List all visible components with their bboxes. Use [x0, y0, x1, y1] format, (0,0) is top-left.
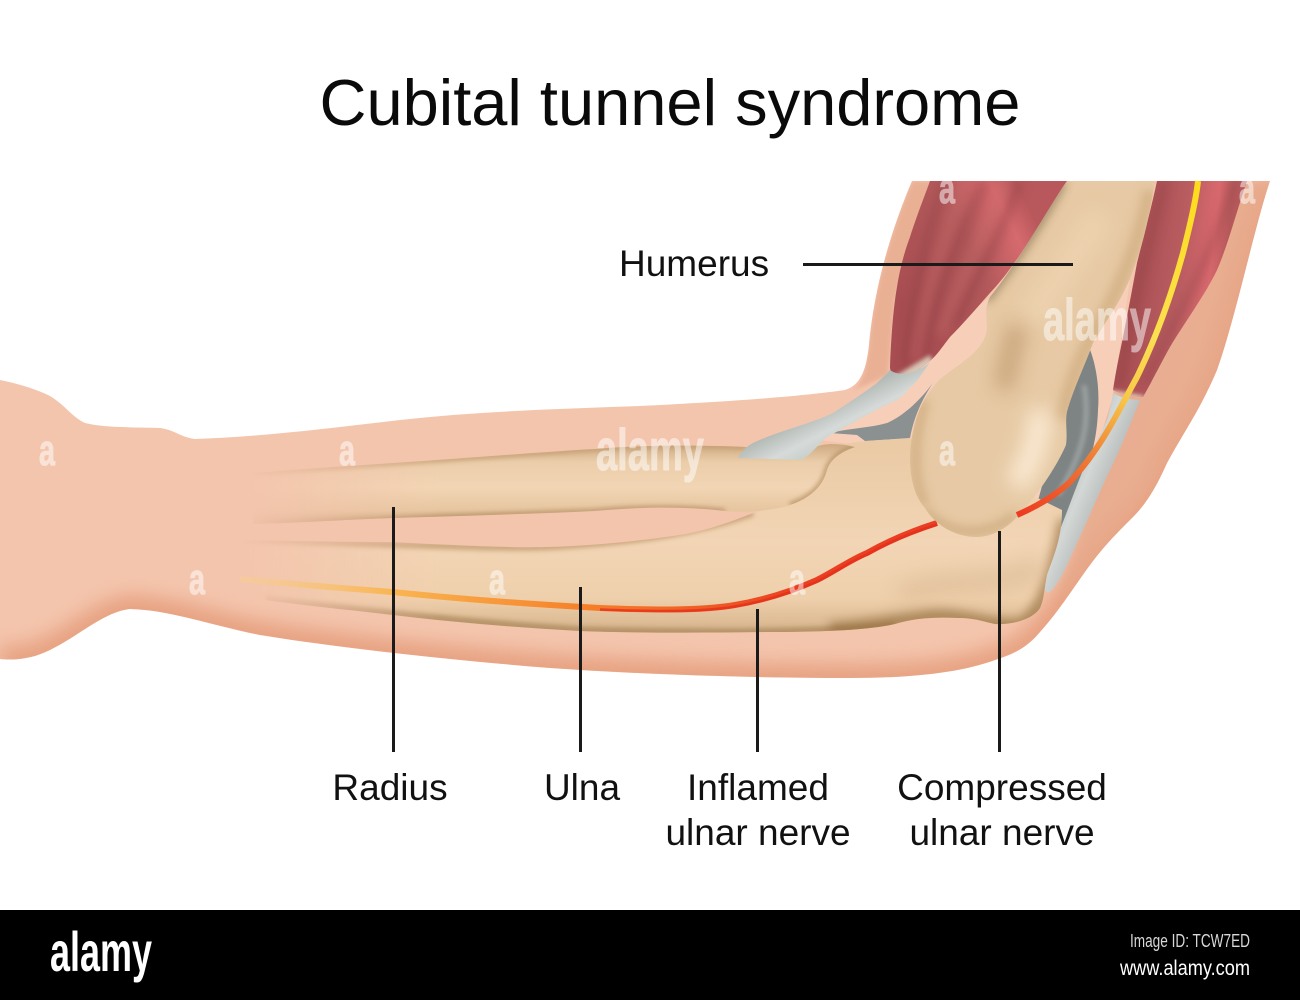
watermarks: a	[789, 555, 805, 604]
label: Ulna: Ulna	[544, 767, 620, 808]
muscle: triceps	[1113, 181, 1247, 397]
label: Inflamed ulnar nerve	[665, 609, 851, 853]
humerus bone	[910, 181, 1155, 537]
capsule highlight	[1058, 385, 1086, 495]
image id: Image ID: TCW7ED	[1130, 931, 1250, 951]
label: Inflamed ulnar nerve: Inflamed	[687, 767, 829, 808]
footer bar	[0, 910, 1300, 1000]
watermarks: a	[1239, 164, 1255, 213]
watermarks: a	[489, 555, 505, 604]
muscle: biceps	[890, 181, 1067, 374]
watermarks: a	[189, 555, 205, 604]
label: Compressed ulnar nerve: ulnar nerve	[909, 812, 1095, 853]
watermarks: a	[939, 426, 955, 475]
footer logo: alamy	[50, 920, 152, 983]
ulna bone	[240, 438, 1066, 633]
radius bone	[253, 444, 855, 524]
title: Cubital tunnel syndrome	[320, 66, 1020, 139]
inflamed ulnar nerve lower segment	[240, 523, 937, 611]
watermarks: alamy	[1043, 288, 1151, 353]
tendon left	[738, 362, 930, 460]
compressed ulnar nerve upper segment	[1017, 181, 1198, 515]
inner soft tissue	[820, 280, 1130, 520]
grey capsule under humerus	[830, 383, 933, 441]
watermark letters: a	[39, 426, 55, 475]
label: Radius: Radius	[332, 767, 448, 808]
arm illustration	[0, 175, 1300, 685]
watermarks	[39, 164, 1255, 604]
label: Compressed ulnar nerve	[897, 531, 1107, 853]
arm skin silhouette	[0, 175, 1300, 685]
label: Compressed ulnar nerve: Compressed	[897, 767, 1107, 808]
label: Ulna	[544, 587, 620, 808]
label: Radius	[332, 507, 448, 808]
watermarks: a	[939, 164, 955, 213]
label: Humerus	[619, 243, 1073, 284]
website: www.alamy.com	[1119, 957, 1250, 980]
label: Inflamed ulnar nerve: ulnar nerve	[665, 812, 851, 853]
label: Humerus: Humerus	[619, 243, 769, 284]
tendon right	[1043, 393, 1140, 592]
watermarks: a	[339, 426, 355, 475]
dark grey joint capsule	[1030, 345, 1098, 585]
watermarks: alamy	[596, 418, 704, 483]
